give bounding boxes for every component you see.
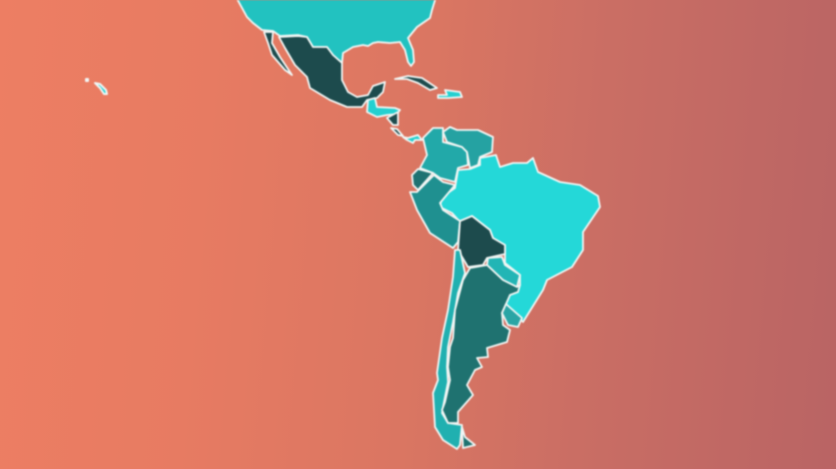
country: Colombia bbox=[420, 128, 468, 182]
country: Hawaii bbox=[86, 79, 107, 94]
country: Cuba bbox=[395, 76, 437, 90]
country: Nicaragua bbox=[387, 112, 398, 125]
country: Guatemala, Honduras and El Salvador bbox=[367, 98, 400, 117]
country: Panama bbox=[403, 135, 422, 143]
country: Argentina bbox=[442, 265, 520, 423]
country: Bolivia bbox=[458, 216, 505, 267]
country: Mexico bbox=[279, 36, 385, 107]
country: Costa Rica bbox=[391, 128, 403, 136]
country: Uruguay bbox=[502, 304, 522, 327]
country: Ecuador bbox=[412, 169, 433, 190]
country: Chile bbox=[433, 250, 465, 449]
country: Peru bbox=[410, 175, 460, 248]
country: United States bbox=[236, 0, 436, 66]
country: Venezuela bbox=[443, 127, 493, 168]
country: Brazil bbox=[440, 155, 600, 322]
country: Paraguay bbox=[487, 257, 520, 287]
country: Hispaniola bbox=[438, 90, 462, 98]
country: Tierra del Fuego bbox=[462, 427, 475, 448]
country: Baja California bbox=[264, 32, 292, 75]
